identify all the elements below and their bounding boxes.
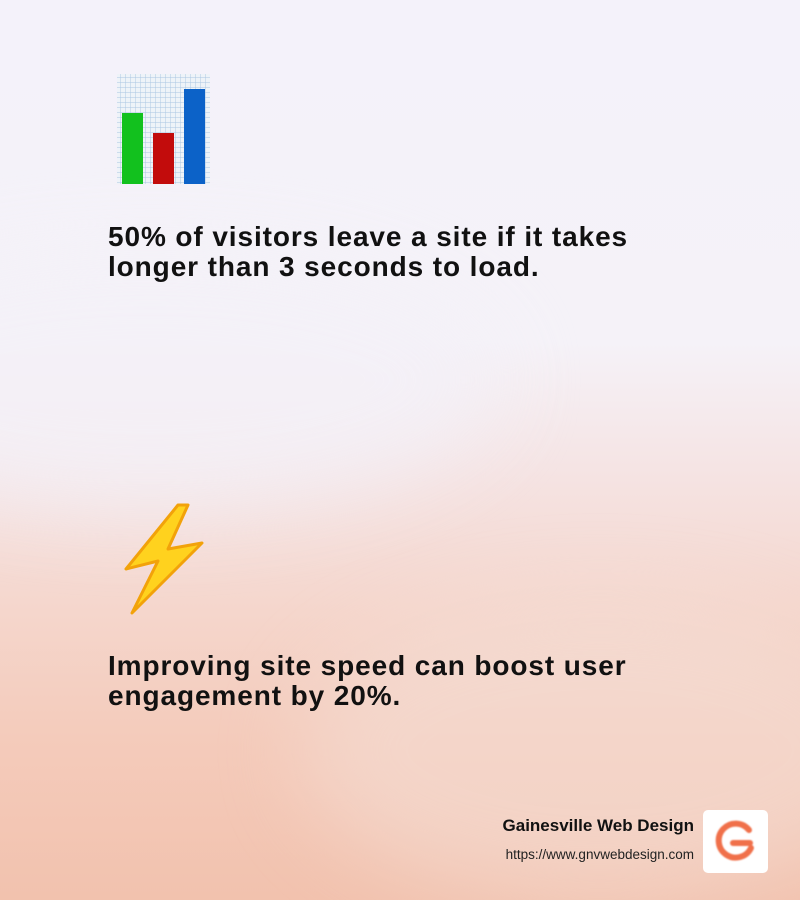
text: stat 2: Improving site speed can boost user — [108, 650, 627, 681]
text: stat 2 — [108, 650, 627, 711]
logo — [703, 810, 768, 873]
brand: name: Gainesville Web Design — [503, 816, 694, 835]
icon: bar chart — [117, 74, 210, 184]
text: stat 1: longer than 3 seconds to load. — [108, 251, 540, 282]
text: stat 1: 50% of visitors leave a site if it takes — [108, 221, 628, 252]
icon: lightning — [124, 504, 204, 614]
text: stat 1 — [108, 221, 628, 282]
brand: url: https://www.gnvwebdesign.com — [506, 847, 694, 862]
text: stat 2: engagement by 20%. — [108, 680, 401, 711]
